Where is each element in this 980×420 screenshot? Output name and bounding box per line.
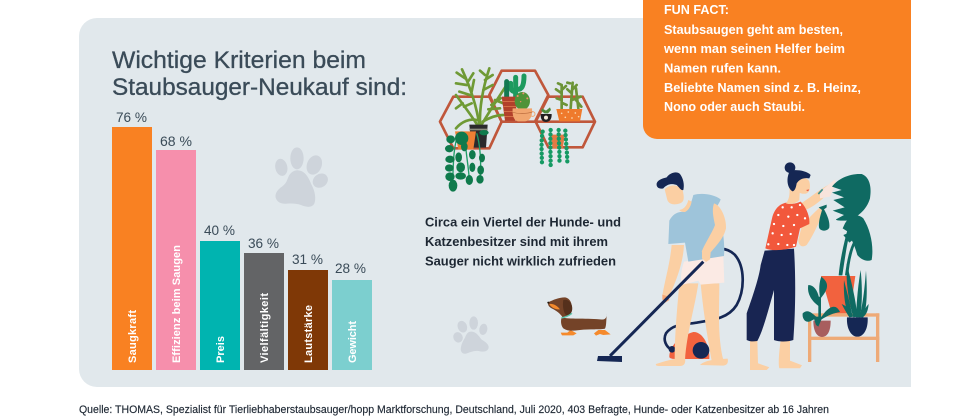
bar: Gewicht 28 % <box>332 260 372 370</box>
bar: Lautstärke 31 % <box>288 251 328 370</box>
text block: fun fact: wenn man seinen Helfer beim <box>663 41 845 56</box>
neck and face <box>786 188 800 204</box>
bar: Preis 40 %: 40 % <box>204 222 235 238</box>
bar: Saugkraft 76 %: Saugkraft <box>127 310 139 363</box>
navy pot <box>847 317 868 337</box>
panel: fun fact <box>643 0 911 139</box>
bar: Effizienz beim Saugen 68 %: Effizienz beim Saugen <box>171 245 183 363</box>
icon: small paw print <box>452 316 489 354</box>
title <box>112 47 407 101</box>
illustration: hexagon shelf with plants <box>440 68 595 192</box>
text block: callout: Sauger nicht wirklich zufrieden <box>425 254 616 268</box>
bar: Gewicht 28 %: Gewicht <box>347 321 359 363</box>
bar chart <box>112 109 372 370</box>
orange pot <box>455 131 476 149</box>
blouse <box>765 202 809 250</box>
text block: callout: Katzenbesitzer sind mit ihrem <box>425 234 608 249</box>
bar: Effizienz beim Saugen 68 % <box>156 133 196 370</box>
hose <box>665 249 743 350</box>
plant stand <box>808 313 879 362</box>
text block: fun fact: Namen rufen kann. <box>664 60 781 76</box>
hanging pot right <box>551 135 565 149</box>
tea cup planter <box>513 108 532 121</box>
spray bottle <box>819 205 829 231</box>
bar: Lautstärke 31 %: 31 % <box>292 251 323 267</box>
succulent orange pot <box>556 83 581 108</box>
text block: fun fact <box>663 2 861 114</box>
illustration: woman with plants <box>747 162 879 370</box>
bar: Gewicht 28 %: 28 % <box>335 260 366 276</box>
vacuum wheel <box>693 342 709 359</box>
right spiky plant <box>842 263 869 317</box>
icon: vacuum nozzle <box>597 356 622 362</box>
cactus group <box>507 76 524 97</box>
text block: fun fact: FUN FACT: <box>664 2 729 17</box>
large orange pot <box>821 276 855 313</box>
text block: callout: Circa ein Viertel der Hunde- und <box>425 214 621 230</box>
hair <box>785 162 795 173</box>
text block: callout <box>425 214 621 268</box>
bar: Vielfältigkeit 36 %: Vielfältigkeit <box>259 293 271 363</box>
source line: Quelle: THOMAS, Spezialist für Tierliebhaberstaubsauger/hopp Marktforschung, Deutschland, Juli 2020, 403 Befragte, Hunde- oder Katzenbesitzer ab 16 Jahren <box>79 404 829 416</box>
dark pot <box>469 125 488 148</box>
small black pot <box>541 107 551 113</box>
shorts <box>681 256 724 285</box>
text block: fun fact: Beliebte Namen sind z. B. Heinz, <box>664 80 861 95</box>
arm back <box>798 184 833 210</box>
palm plant <box>456 68 506 128</box>
bar: Effizienz beim Saugen 68 %: 68 % <box>160 133 192 149</box>
hanging plant <box>453 133 481 183</box>
bar: Vielfältigkeit 36 %: 36 % <box>248 235 279 251</box>
illustration: man vacuuming <box>610 172 743 366</box>
feet and legs <box>750 340 769 370</box>
text block: fun fact: Staubsaugen geht am besten, <box>664 22 843 37</box>
panel: background <box>79 18 911 387</box>
hair <box>657 172 684 190</box>
title: Wichtige Kriterien beim <box>112 47 366 74</box>
front leg <box>675 283 698 360</box>
wand <box>610 262 703 356</box>
neck and face <box>679 200 692 212</box>
left small plant <box>813 321 831 337</box>
bar: Preis 40 % <box>200 222 240 370</box>
arm left <box>662 245 684 297</box>
bar: Vielfältigkeit 36 % <box>244 235 284 370</box>
bar: Saugkraft 76 % <box>112 109 152 370</box>
text block: fun fact: Nono oder auch Staubi. <box>664 99 805 114</box>
trousers <box>747 249 795 341</box>
vacuum body <box>669 332 709 359</box>
arm front <box>798 207 825 246</box>
monstera plant <box>832 174 872 275</box>
illustration: dachshund <box>547 297 611 336</box>
shirt <box>668 194 724 262</box>
bar: Preis 40 %: Preis <box>215 336 227 363</box>
icon: large paw print <box>274 147 331 207</box>
shelf <box>440 71 595 148</box>
title: Staubsauger-Neukauf sind: <box>112 74 407 101</box>
bar: Saugkraft 76 %: 76 % <box>116 109 147 125</box>
bar: Lautstärke 31 %: Lautstärke <box>303 305 315 363</box>
back leg <box>701 283 723 361</box>
right arm <box>702 203 726 253</box>
